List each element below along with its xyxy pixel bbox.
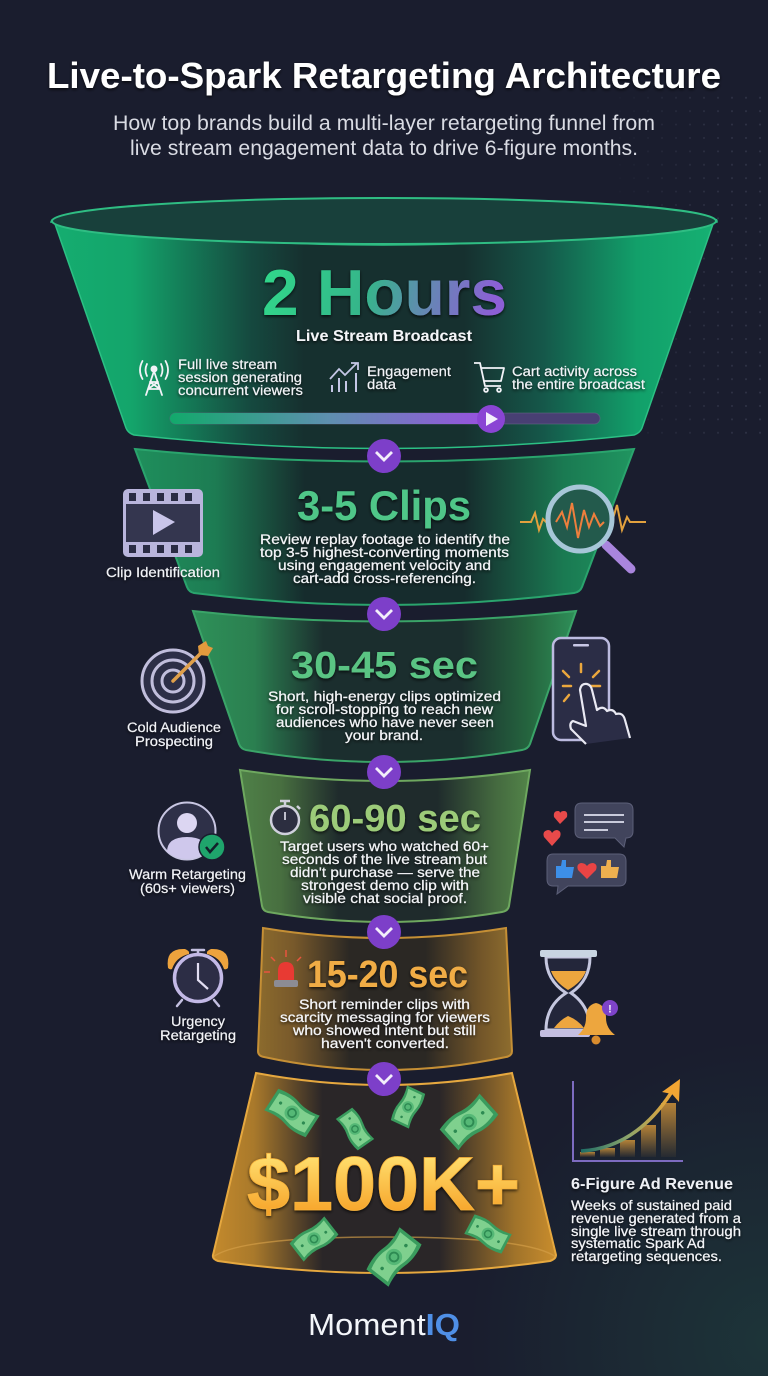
label: urgency retargeting: Urgency (171, 1014, 225, 1029)
icon: film strip (124, 490, 202, 556)
subtitle: live stream engagement data to drive 6-figure months. (130, 136, 638, 160)
text: engagement data (367, 364, 451, 392)
icon: phone tap (553, 638, 630, 744)
icon: chat social proof (544, 803, 633, 894)
text: revenue description: single live stream through (571, 1223, 741, 1239)
panel: 60-90 sec (129, 770, 633, 922)
logo: MomentIQ: MomentIQ (308, 1307, 460, 1342)
money notes (263, 1085, 512, 1288)
subtitle: How top brands build a multi-layer retargeting funnel from (113, 111, 655, 135)
icon: hourglass and bell (540, 950, 618, 1044)
chart: revenue growth (573, 1079, 683, 1161)
text: urgency description: who showed intent but still (292, 1022, 476, 1038)
icon: engagement chart (330, 363, 358, 392)
panel: 30-45 sec (127, 611, 630, 762)
icon: stopwatch (271, 801, 300, 834)
icon: siren (264, 950, 301, 987)
title: Live-to-Spark Retargeting Architecture (47, 55, 721, 96)
text: clips description: Review replay footage to identify the (260, 531, 510, 547)
panel: 15-20 sec (160, 928, 618, 1070)
label: cold audience prospecting: Cold Audience (127, 720, 221, 735)
text: warm retargeting description: strongest demo clip with (301, 877, 469, 893)
text: urgency description: Short reminder clips with (299, 996, 470, 1012)
text: warm retargeting description: seconds of the live stream but (282, 851, 487, 867)
text: revenue description: revenue generated from a (571, 1210, 741, 1226)
text: prospecting description: Short, high-energy clips optimized (268, 688, 501, 704)
icon: target with arrow (142, 641, 213, 712)
text: prospecting description: your brand. (345, 727, 423, 743)
big number: 30-45 sec: 30-45 sec (291, 645, 478, 687)
heading: 6-figure ad revenue: 6-Figure Ad Revenue (571, 1176, 733, 1193)
text: warm retargeting description: Target users who watched 60+ (280, 838, 489, 854)
big number: 2 hours: 2 Hours (262, 256, 507, 329)
text: warm retargeting description: visible chat social proof. (303, 890, 467, 906)
text: cart activity (512, 364, 645, 392)
text: engagement data: Engagement (367, 364, 451, 379)
progress bar (170, 405, 600, 433)
text: urgency description: haven't converted. (321, 1035, 449, 1051)
big number: $100K+: $100K+ (247, 1142, 520, 1227)
icon: hourglass and bell: ! (608, 1004, 612, 1016)
icon: verified person (158, 802, 225, 860)
text: clips description: cart-add cross-referencing. (293, 570, 476, 586)
text: urgency description (280, 996, 490, 1051)
text: full live stream: session generating (178, 370, 302, 385)
text: full live stream (178, 357, 303, 398)
subtitle (113, 111, 655, 160)
text: warm retargeting description (280, 838, 489, 906)
text: revenue description: systematic Spark Ad (571, 1235, 705, 1251)
text: cart activity: Cart activity across (512, 364, 637, 379)
big number: 3-5 clips: 3-5 Clips (297, 482, 471, 529)
label: cold audience prospecting: Prospecting (135, 734, 213, 749)
icon: magnifier with pulse (520, 487, 646, 569)
label: warm retargeting: (60s+ viewers) (140, 881, 235, 896)
label: cold audience prospecting (127, 720, 221, 749)
label: urgency retargeting (160, 1014, 236, 1043)
panel: 3-5 clips (106, 449, 646, 605)
chevron connectors (367, 439, 401, 1096)
text: warm retargeting description: didn't purchase — serve the (290, 864, 480, 880)
text: engagement data: data (367, 377, 397, 392)
text: full live stream: concurrent viewers (178, 383, 303, 398)
icon: broadcast tower (140, 361, 168, 395)
text: revenue description (571, 1197, 741, 1264)
label: warm retargeting (129, 867, 246, 896)
text: clips description (260, 531, 510, 586)
text: revenue description: retargeting sequences. (571, 1248, 722, 1264)
panel: 2 hours live stream (51, 198, 717, 448)
text: prospecting description: for scroll-stopping to reach new (276, 701, 494, 717)
panel: $100K+ revenue (213, 1073, 556, 1288)
text: prospecting description: audiences who have never seen (276, 714, 494, 730)
icon: alarm clock (168, 949, 228, 1006)
text: clips description: top 3-5 highest-converting moments (260, 544, 509, 560)
icon: shopping cart (474, 363, 504, 392)
text: cart activity: the entire broadcast (512, 377, 645, 392)
label: clip identification: Clip Identification (106, 565, 220, 580)
text: revenue description: Weeks of sustained paid (571, 1197, 732, 1213)
label: urgency retargeting: Retargeting (160, 1028, 236, 1043)
big number: 60-90 sec: 60-90 sec (309, 798, 481, 840)
label: warm retargeting: Warm Retargeting (129, 867, 246, 882)
text: clips description: using engagement velocity and (278, 557, 491, 573)
text: prospecting description (268, 688, 501, 743)
label: live stream broadcast: Live Stream Broadcast (296, 328, 473, 345)
text: full live stream: Full live stream (178, 357, 277, 372)
big number: 15-20 sec: 15-20 sec (307, 954, 468, 996)
text: urgency description: scarcity messaging for viewers (280, 1009, 490, 1025)
